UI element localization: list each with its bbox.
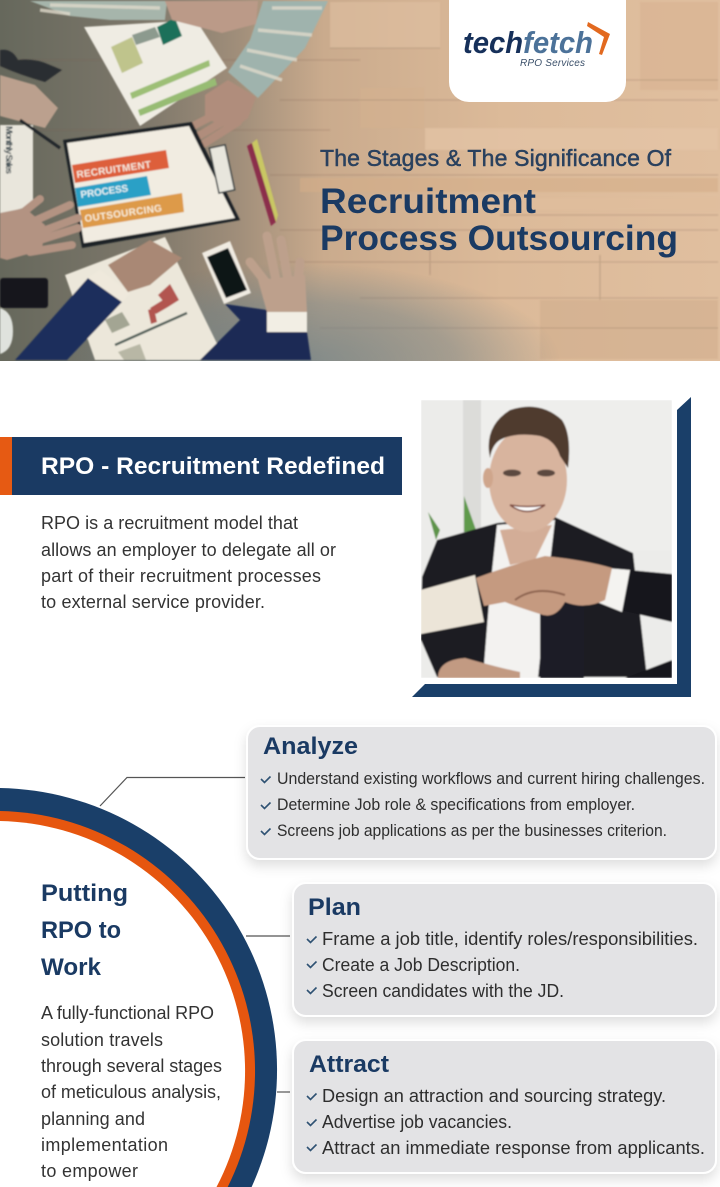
far sleeve (620, 570, 672, 622)
navy sleeve (15, 278, 122, 360)
meeting table photo: PROCESS (80, 183, 129, 201)
plan list: Screen candidates with the JD. (322, 981, 564, 1001)
section heading: RPO redefined (0, 437, 402, 495)
logo arrow (587, 22, 610, 55)
shirt (483, 520, 555, 678)
bottom document (65, 237, 225, 360)
RPO description: part of their recruitment processes (41, 566, 321, 586)
putting RPO to work description: implementation (41, 1135, 168, 1155)
RPO description: RPO is a recruitment model that (41, 513, 298, 533)
analyze list (261, 770, 705, 840)
putting RPO to work description: solution travels (41, 1030, 163, 1050)
analyze list: Determine Job role & specifications from employer. (277, 796, 635, 814)
attract heading: Attract (309, 1051, 389, 1078)
title intro: The Stages & The Significance Of (320, 145, 672, 171)
putting RPO to work description: planning and (41, 1109, 145, 1129)
eyes and smile (503, 470, 521, 476)
hero banner (0, 0, 720, 361)
cup (0, 308, 13, 354)
left top hand (0, 75, 58, 128)
clipboard pen (20, 120, 60, 148)
putting RPO to work heading (41, 880, 128, 981)
RPO description: allows an employer to delegate all or (41, 540, 336, 560)
connector: plan (246, 935, 290, 937)
attract list: Design an attraction and sourcing strategy. (322, 1086, 666, 1106)
analyze list: Screens job applications as per the businesses criterion. (277, 822, 667, 840)
process bar (75, 176, 151, 207)
section heading: RPO redefined: RPO - Recruitment Redefined (41, 453, 385, 480)
near sleeve (421, 575, 484, 634)
outsourcing bar (80, 193, 184, 228)
hair (489, 407, 569, 468)
clip (209, 145, 235, 193)
RPO description (41, 513, 336, 612)
panel: plan (293, 883, 716, 1016)
meeting table photo: OUTSOURCING (84, 203, 163, 225)
photo frame (412, 397, 691, 697)
putting RPO to work heading: Work (41, 954, 102, 981)
top hand (165, 1, 258, 33)
white cuff (267, 312, 307, 332)
dark sleeve (200, 304, 311, 360)
meeting table photo (0, 1, 328, 360)
panel: attract (293, 1040, 716, 1173)
plan list: Frame a job title, identify roles/responsibilities. (322, 929, 698, 949)
handshake (476, 556, 612, 616)
logo wordmark: techfetch (463, 25, 593, 60)
RPO description: to external service provider. (41, 592, 265, 612)
right hand on clipboard (195, 80, 256, 143)
right hand (250, 236, 307, 312)
putting RPO to work heading: RPO to (41, 917, 121, 944)
left document (0, 125, 33, 215)
title main: Process Outsourcing (320, 219, 678, 258)
attract list: Attract an immediate response from applicants. (322, 1138, 705, 1158)
putting RPO to work description: to empower (41, 1161, 138, 1181)
dark phone (0, 278, 48, 308)
clipboard (63, 122, 240, 248)
connector: analyze (100, 778, 245, 806)
logo card (449, 0, 626, 102)
lower hand (438, 658, 520, 678)
top document (84, 20, 227, 126)
white phone (202, 241, 251, 304)
title main (320, 182, 678, 258)
attract list (307, 1086, 705, 1158)
shirt cuff (88, 278, 122, 302)
plan list: Create a Job Description. (322, 955, 520, 975)
putting RPO to work description (41, 1003, 222, 1181)
analyze heading: Analyze (263, 733, 358, 760)
arc: concentric rings (0, 788, 277, 1187)
meeting table photo: Monthly Sales (4, 126, 14, 174)
putting RPO to work heading: Putting (41, 880, 128, 907)
putting RPO to work description: A fully-functional RPO (41, 1003, 214, 1023)
neck and face (489, 428, 567, 532)
plan heading: Plan (308, 894, 361, 921)
suit (421, 517, 647, 677)
top sleeves (30, 1, 167, 20)
wooden table background (0, 0, 720, 361)
title main: Recruitment (320, 182, 536, 221)
putting RPO to work description: of meticulous analysis, (41, 1082, 221, 1102)
glasses (0, 50, 62, 82)
lower hand (108, 240, 182, 292)
meeting table photo: RECRUITMENT (76, 160, 152, 181)
analyze list: Understand existing workflows and current hiring challenges. (277, 770, 705, 788)
plan list (307, 929, 698, 1001)
putting RPO to work description: through several stages (41, 1056, 222, 1076)
connector: attract (277, 1091, 290, 1093)
plant (428, 512, 440, 540)
logo subtitle: RPO Services (520, 58, 585, 69)
photo: handshake (421, 400, 672, 678)
recruitment bar (72, 150, 169, 183)
panel: analyze (247, 726, 716, 859)
pencils (247, 143, 276, 226)
attract list: Advertise job vacancies. (322, 1112, 512, 1132)
left middle hand (0, 199, 78, 260)
